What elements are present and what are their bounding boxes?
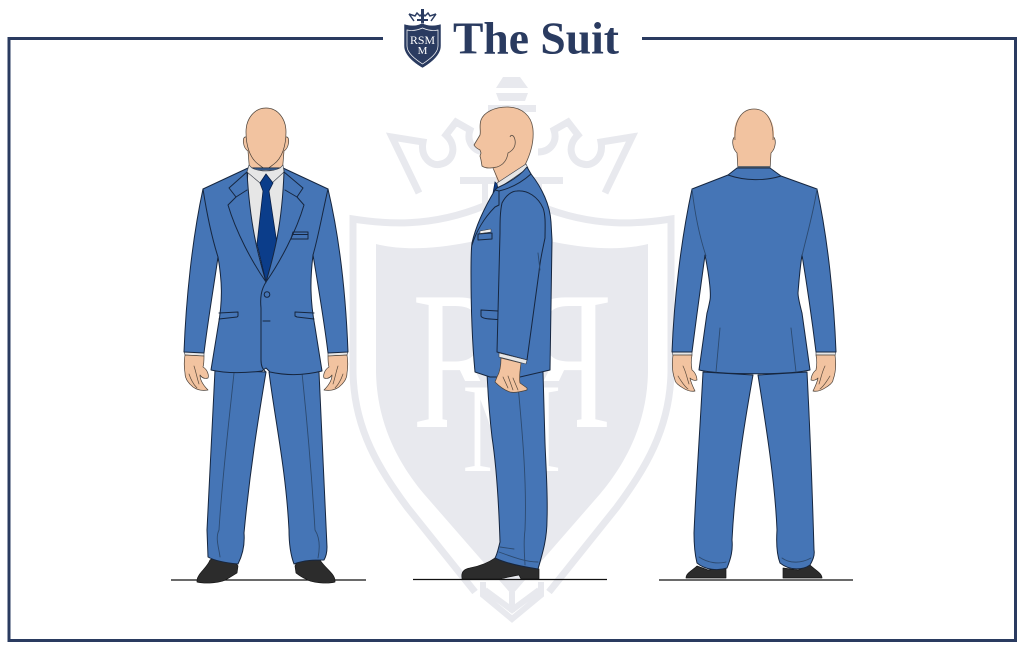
front right cuff and hand — [324, 351, 348, 390]
back shoes — [686, 565, 822, 578]
back jacket — [672, 168, 836, 374]
watermark crown — [392, 77, 632, 208]
side hip pocket — [481, 310, 498, 320]
front tie — [257, 174, 277, 282]
title: The Suit — [453, 14, 619, 64]
side breast pocket — [478, 233, 492, 240]
side head — [474, 107, 533, 186]
front shoes — [197, 557, 335, 583]
front right lapel — [266, 172, 304, 282]
figure: back view — [659, 109, 853, 580]
side pocket square — [480, 229, 491, 234]
front pockets — [219, 232, 314, 319]
watermark monogram: M — [462, 357, 561, 499]
back shirt collar — [737, 166, 771, 170]
front jacket seams — [203, 189, 328, 372]
ground line — [413, 578, 607, 580]
logo crown — [409, 13, 436, 21]
front left cuff and hand — [184, 351, 208, 390]
front jacket — [184, 165, 348, 375]
back cuffs and hands — [672, 351, 836, 391]
watermark shield tip — [483, 582, 541, 619]
side lapel lines — [472, 174, 531, 245]
watermark: crest — [353, 77, 671, 619]
figure: side view — [413, 107, 607, 580]
logo — [404, 9, 441, 68]
front head — [243, 108, 289, 175]
side cuff — [499, 353, 527, 364]
front button — [264, 292, 270, 297]
watermark shield fill — [376, 230, 648, 595]
side jacket — [471, 167, 552, 392]
back collar line — [728, 175, 781, 180]
side trousers — [487, 372, 547, 569]
front shirt — [247, 170, 285, 282]
logo monogram: RSM — [410, 33, 435, 47]
logo cross — [417, 9, 428, 24]
ground line — [171, 579, 366, 581]
front trousers — [207, 370, 327, 564]
watermark monogram: R — [513, 250, 612, 470]
watermark monogram: R — [412, 250, 511, 470]
logo shield — [404, 23, 441, 68]
back trousers — [694, 372, 814, 570]
front collar — [247, 165, 284, 183]
side sleeve — [497, 191, 545, 360]
front left lapel — [228, 172, 266, 282]
figure: front view — [171, 108, 366, 583]
side sleeve crease — [538, 253, 540, 270]
side shoe — [462, 558, 539, 579]
logo shield inner line — [407, 28, 438, 64]
watermark monogram — [412, 250, 612, 499]
side hand — [495, 358, 527, 392]
watermark shield outline — [353, 196, 671, 592]
back head — [733, 109, 775, 170]
side tie — [493, 182, 498, 193]
side collar — [497, 164, 528, 188]
ground line — [659, 579, 853, 581]
back seams and vents — [692, 189, 817, 372]
logo monogram M: M — [418, 45, 428, 57]
